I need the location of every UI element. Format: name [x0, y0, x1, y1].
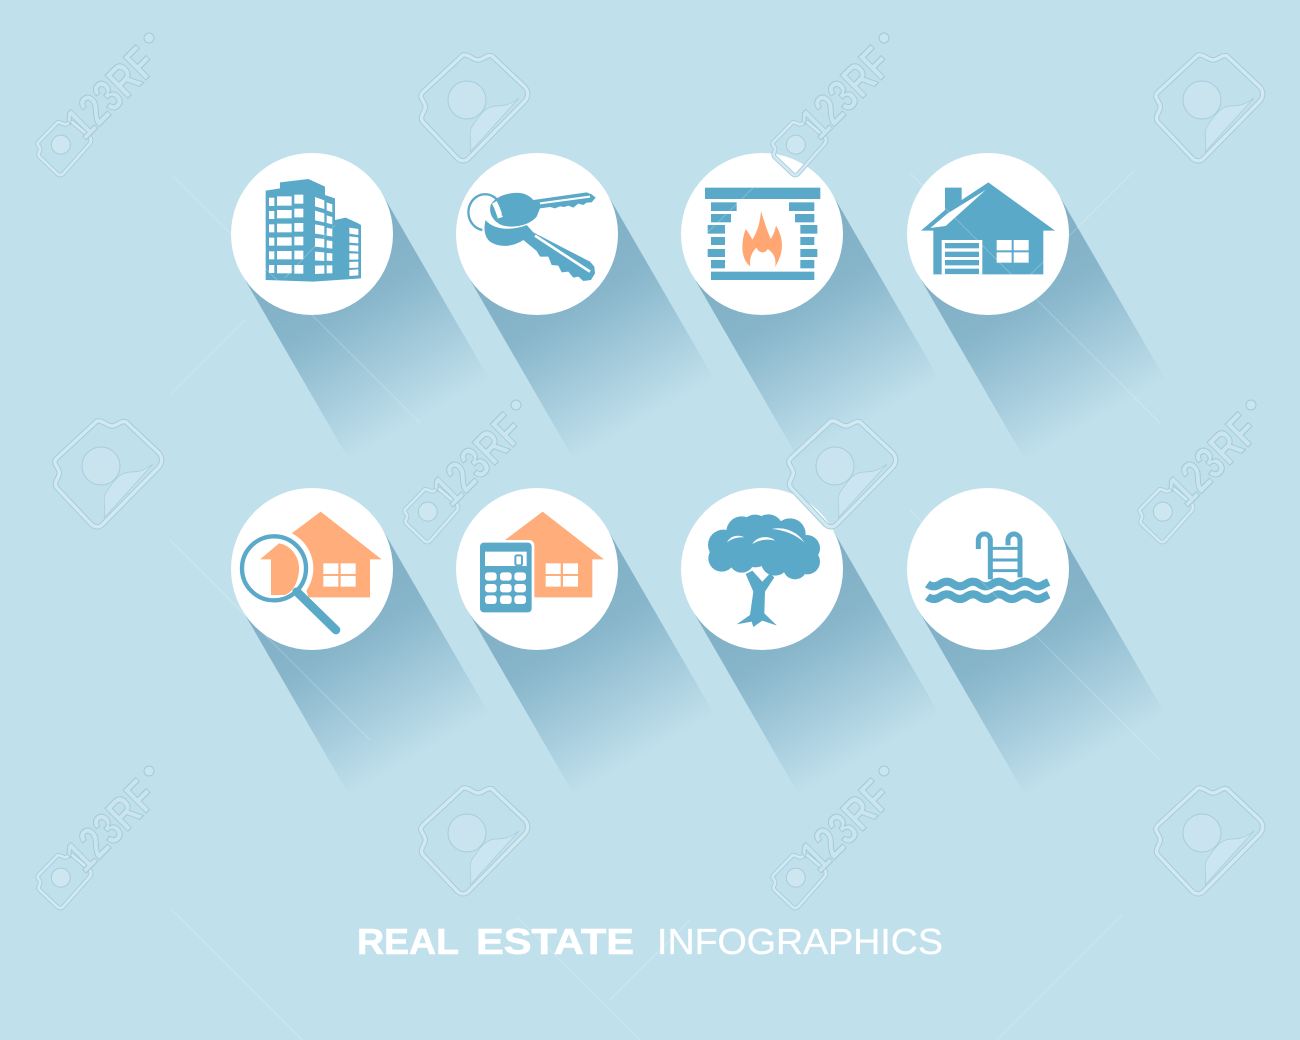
watermarks: 123RF [54, 36, 167, 149]
icon: calculator with house [477, 512, 604, 615]
watermarks: 123RF [54, 769, 167, 882]
title: REAL [357, 921, 459, 962]
watermarks: 123RF [1156, 403, 1269, 516]
icon: office buildings [266, 179, 361, 282]
icon: fireplace [705, 188, 820, 280]
watermarks: 123RF [789, 769, 902, 882]
faint diagonal lines [170, 170, 1160, 1040]
long shadows [242, 194, 1166, 796]
watermarks: 123RF [421, 403, 534, 516]
icon: keys [468, 192, 596, 281]
icon: house with garage [921, 182, 1055, 274]
icon: tree [708, 514, 820, 627]
icon: magnifier over house [235, 512, 382, 630]
title: ESTATE [476, 921, 634, 962]
watermarks [37, 33, 1269, 909]
white circles [231, 153, 1069, 650]
title: INFOGRAPHICS [657, 921, 943, 962]
icon: swimming pool [927, 534, 1049, 599]
title [357, 921, 943, 962]
watermarks: 123RF [789, 36, 902, 149]
